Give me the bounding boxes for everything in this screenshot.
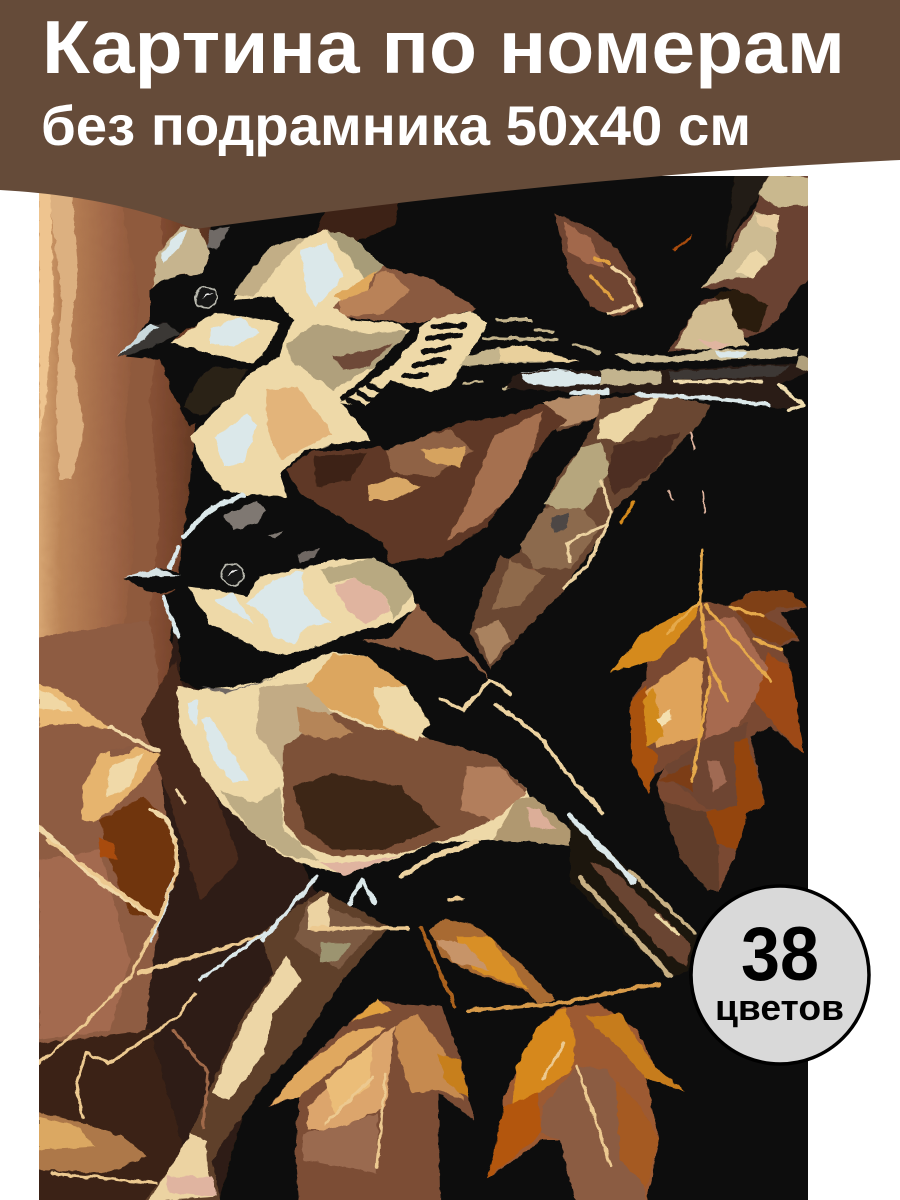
lower twigs [39, 840, 659, 1183]
top leaf [555, 213, 693, 317]
wooden trunk background [20, 170, 775, 1200]
twigs by lower bird [402, 680, 603, 877]
header banner [0, 0, 900, 229]
badge number: 38 [741, 912, 819, 997]
small orange leaf [429, 918, 555, 1003]
lower bird tail [570, 816, 697, 978]
upper bird cream plumage [190, 230, 413, 497]
upper diagonal branch [500, 175, 814, 598]
lower bird body [177, 652, 590, 873]
upper bird head and throat [127, 227, 290, 427]
lower left leaf [39, 1112, 147, 1173]
upper bird wing with ladder feathers [340, 312, 600, 450]
painting: two birds on an autumn branch [20, 150, 830, 1200]
badge: 38 colours [691, 886, 869, 1064]
lower bird wing [363, 603, 490, 680]
upper bird beak [117, 323, 180, 358]
lower bird [123, 495, 620, 900]
badge label: цветов [715, 987, 844, 1028]
left autumn leaf and twigs [39, 683, 185, 940]
lower bird head [162, 497, 387, 690]
lower bird eye [221, 563, 243, 585]
branch segment behind lower bird [470, 555, 565, 670]
upper bird tail [500, 320, 810, 410]
title: Картина по номерам [42, 5, 845, 89]
right maple leaf [610, 550, 807, 892]
bottom centre leaf [269, 999, 475, 1200]
lower bird beak [123, 568, 188, 593]
bottom right leaf [488, 1003, 685, 1200]
lower bird black back [399, 646, 517, 900]
upper bird eye [195, 287, 217, 308]
upper bird body [287, 403, 567, 563]
subtitle: без подрамника 50х40 см [41, 94, 751, 157]
upper bird [117, 227, 600, 563]
lower branch [143, 890, 390, 1200]
lower left details, branch and leaves [39, 840, 685, 1200]
